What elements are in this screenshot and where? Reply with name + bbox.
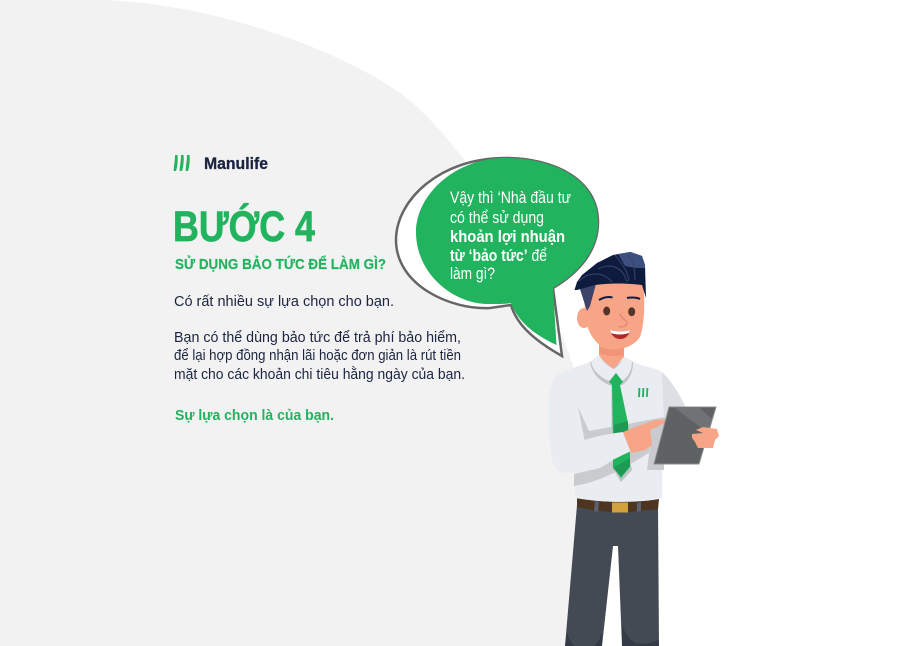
shirt [548, 362, 685, 502]
bubble text: từ ‘bảo tức’ để [450, 246, 547, 265]
bubble outline [396, 158, 598, 356]
face [583, 280, 644, 350]
neck [599, 340, 624, 369]
title: BƯỚC 4 [173, 202, 315, 251]
ear [577, 308, 591, 328]
speech bubble [396, 158, 598, 356]
closing statement: Sự lựa chọn là của bạn. [175, 407, 334, 424]
bubble green fill [416, 158, 598, 345]
hair highlight [618, 252, 645, 268]
holding hand [692, 427, 719, 448]
belt [577, 498, 659, 512]
background grey shape [0, 0, 590, 646]
subtitle: SỬ DỤNG BẢO TỨC ĐỂ LÀM GÌ? [175, 255, 386, 273]
tie shadow [610, 385, 632, 482]
tablet [654, 407, 716, 464]
logo wordmark: Manulife [204, 154, 268, 173]
hair strands [579, 254, 635, 282]
body paragraph: để lại hợp đồng nhận lãi hoặc đơn giản là rút tiền [174, 347, 461, 364]
tablet glare [675, 408, 712, 433]
teeth [610, 330, 630, 334]
shirt right-side shade [662, 372, 685, 420]
Manulife logo [174, 154, 268, 173]
sideburn left [579, 284, 596, 311]
pointing hand [623, 420, 665, 453]
bubble text [450, 188, 571, 283]
neck shadow under chin [599, 346, 624, 356]
hair [574, 252, 646, 298]
icon: Manulife stripes [174, 155, 190, 171]
collar front [591, 355, 632, 381]
bubble text: khoản lợi nhuận [450, 227, 565, 246]
sleeve shadow on torso [574, 407, 665, 486]
nose [619, 314, 627, 327]
tie shadow band [613, 421, 630, 476]
mouth [610, 330, 630, 339]
body paragraph: mặt cho các khoản chi tiêu hằng ngày của bạn. [174, 366, 465, 383]
eyes [603, 306, 610, 316]
body paragraph [174, 329, 465, 383]
belt loops [594, 501, 641, 512]
trouser hem shadows [565, 625, 659, 646]
belt buckle [612, 502, 628, 512]
bubble text: làm gì? [450, 264, 495, 283]
collar shadow [590, 356, 633, 386]
illustration: businessman with tablet [548, 252, 719, 646]
tie [609, 373, 630, 478]
left arm sleeve [549, 385, 631, 473]
body paragraph: Bạn có thể dùng bảo tức để trả phí bảo hiểm, [174, 329, 461, 346]
intro sentence: Có rất nhiều sự lựa chọn cho bạn. [174, 293, 394, 310]
eyebrows [599, 297, 640, 300]
bubble text: Vậy thì ‘Nhà đầu tư [450, 188, 571, 207]
shirt pocket logo [638, 388, 648, 397]
bubble text: có thể sử dụng [450, 208, 544, 227]
trousers [565, 505, 659, 646]
